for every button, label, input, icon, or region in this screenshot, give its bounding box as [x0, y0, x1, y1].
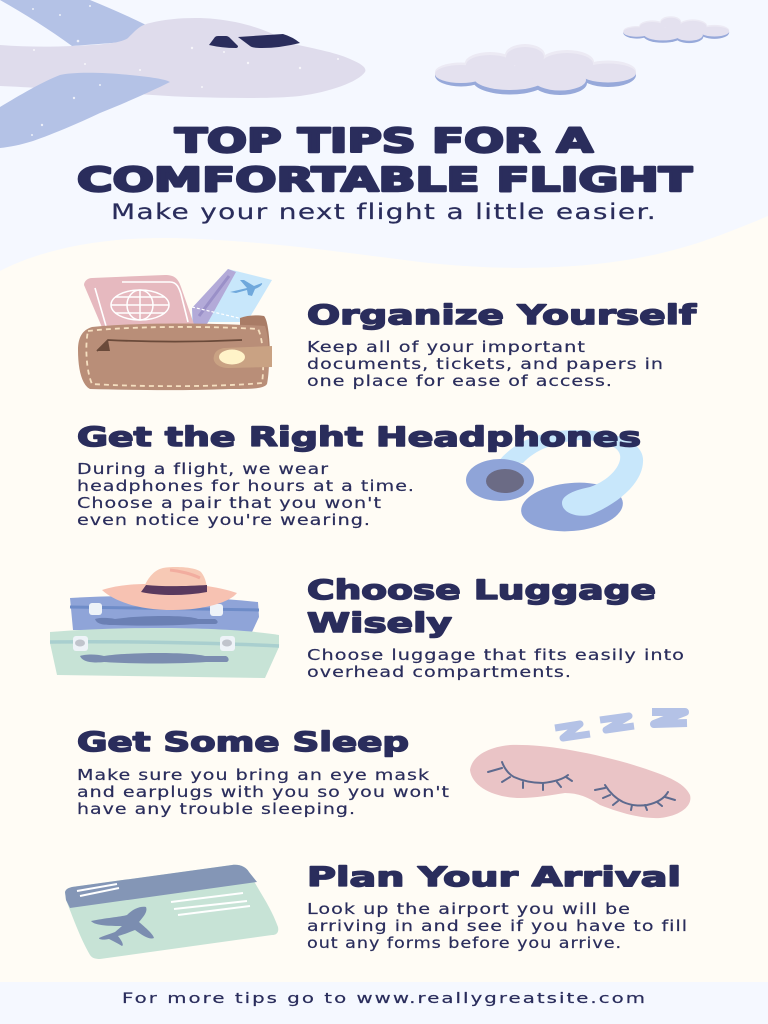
text: organize yourself description: documents, tickets, and papers in [307, 355, 664, 373]
text: arrival description: out any forms before you arrive. [307, 934, 622, 952]
text: organize yourself description: Keep all of your important [307, 338, 586, 356]
text: organize yourself description: one place for ease of access. [307, 372, 613, 390]
heading: plan your arrival: Plan Your Arrival [307, 862, 681, 893]
text: sleep description: and earplugs with you so you won't [77, 783, 450, 801]
text: headphones description: Choose a pair that you won't [77, 494, 382, 512]
footer text: For more tips go to www.reallygreatsite.com [122, 991, 647, 1007]
text: headphones description [77, 460, 415, 529]
text: arrival description: arriving in and see if you have to fill [307, 917, 688, 935]
footer band [0, 982, 768, 1024]
illustration: large cloud [435, 44, 636, 95]
illustration: small cloud [623, 16, 729, 43]
heading: get the right headphones: Get the Right Headphones [77, 422, 641, 453]
tip 5: arrival [65, 862, 688, 959]
tip 4: sleep [77, 712, 690, 818]
heading: choose luggage wisely [307, 575, 656, 639]
heading: get some sleep: Get Some Sleep [77, 727, 409, 758]
title: COMFORTABLE FLIGHT [77, 160, 693, 199]
text: arrival description [307, 900, 688, 952]
text: sleep description [77, 766, 450, 818]
icon: headphones [466, 430, 643, 535]
text: arrival description: Look up the airport you will be [307, 900, 631, 918]
icon: eye mask [470, 745, 690, 818]
text: luggage description: overhead compartments. [307, 663, 572, 681]
text: headphones description: During a flight, we wear [77, 460, 329, 478]
tip 3: luggage [50, 567, 685, 681]
text: headphones description: even notice you're wearing. [77, 511, 371, 529]
icon: suitcases and hat [50, 567, 279, 678]
heading: organize yourself: Organize Yourself [307, 300, 696, 331]
illustration: airplane [0, 0, 365, 148]
text: luggage description: Choose luggage that fits easily into [307, 646, 685, 664]
icon: wallet with passport and ticket [78, 269, 272, 390]
icon: boarding pass [65, 865, 278, 959]
text: headphones description: headphones for hours at a time. [77, 477, 415, 495]
text: luggage description [307, 646, 685, 681]
icon: sleep letters [555, 712, 687, 738]
text: organize yourself description [307, 338, 664, 390]
tip 1: organize yourself [78, 269, 696, 390]
heading: choose luggage wisely: Wisely [307, 608, 453, 639]
subtitle: Make your next flight a little easier. [111, 200, 657, 224]
heading: choose luggage wisely: Choose Luggage [307, 575, 656, 606]
text: sleep description: Make sure you bring an eye mask [77, 766, 430, 784]
text: sleep description: have any trouble sleeping. [77, 800, 356, 818]
tip 2: headphones [77, 422, 643, 535]
title [77, 121, 693, 199]
title: TOP TIPS FOR A [175, 121, 594, 160]
sky background with wave [0, 0, 768, 271]
